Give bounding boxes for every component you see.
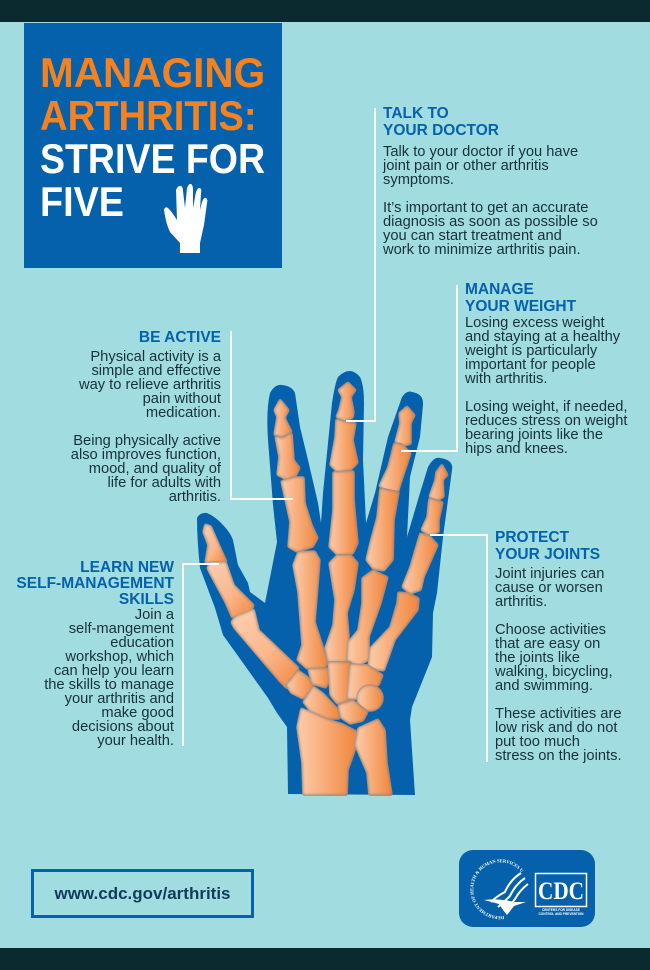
- top bar: [0, 0, 650, 22]
- heading: [16, 559, 174, 608]
- CDC mark: [536, 874, 586, 916]
- body text: workshop, which: [65, 649, 174, 665]
- body text: also improves function,: [71, 447, 221, 463]
- body text: Physical activity is a: [90, 349, 221, 365]
- body text: [495, 566, 622, 764]
- heading: PROTECT: [495, 529, 569, 546]
- CDC mark: CDC: [538, 878, 584, 905]
- body text: joint pain or other arthritis: [383, 158, 549, 174]
- heading: TALK TO: [383, 105, 449, 122]
- radius bone: [297, 708, 358, 795]
- body text: stress on the joints.: [495, 748, 622, 764]
- index finger: [274, 399, 292, 437]
- heading: BE ACTIVE: [139, 329, 221, 346]
- body text: reduces stress on weight: [465, 413, 627, 429]
- body text: make good: [101, 705, 174, 721]
- callout: talk to your doctor: [382, 105, 598, 258]
- body text: and swimming.: [495, 678, 593, 694]
- body text: Join a: [135, 607, 174, 623]
- body text: [44, 607, 174, 749]
- hand silhouette: [197, 371, 452, 795]
- body text: low risk and do not: [495, 720, 617, 736]
- body text: education: [110, 635, 174, 651]
- ulna bone: [355, 719, 392, 795]
- icon: white hand: [164, 184, 208, 253]
- middle finger: [336, 382, 356, 421]
- body text: Choose activities: [495, 622, 606, 638]
- body text: [382, 144, 598, 258]
- heading: LEARN NEW: [80, 559, 174, 576]
- ring finger: [395, 406, 415, 446]
- callout: protect your joints: [495, 529, 622, 764]
- body text: walking, bicycling,: [495, 664, 613, 680]
- body text: arthritis.: [169, 489, 221, 505]
- body text: life for adults with: [108, 475, 221, 491]
- title line: arthritis: ARTHRITIS:: [40, 92, 257, 139]
- little finger: [429, 464, 448, 501]
- body text: weight is particularly: [465, 343, 597, 359]
- heading: SKILLS: [119, 591, 174, 608]
- body text: Losing excess weight: [465, 315, 605, 331]
- body text: the skills to manage: [44, 677, 174, 693]
- body text: pain without: [143, 391, 221, 407]
- callout: manage your weight: [465, 281, 628, 457]
- callout lines: [183, 108, 487, 762]
- title line: strive for: STRIVE FOR: [40, 135, 265, 182]
- body text: way to relieve arthritis: [79, 377, 221, 393]
- body text: [71, 349, 222, 505]
- title panel: [24, 23, 282, 268]
- body text: mood, and quality of: [89, 461, 221, 477]
- title line: five: FIVE: [40, 178, 124, 225]
- body text: Talk to your doctor if you have: [383, 144, 578, 160]
- body text: that are easy on: [495, 636, 600, 652]
- body text: hips and knees.: [465, 441, 568, 457]
- body text: [465, 315, 628, 457]
- body text: the joints like: [495, 650, 580, 666]
- body text: Losing weight, if needed,: [465, 399, 628, 415]
- body text: Joint injuries can: [495, 566, 604, 582]
- finger and wrist bones: [203, 382, 448, 795]
- bottom bar: [0, 948, 650, 970]
- logo background: [459, 850, 595, 927]
- body text: important for people: [465, 357, 596, 373]
- body text: your health.: [97, 733, 174, 749]
- thumb bones: [203, 524, 227, 563]
- body text: put too much: [495, 734, 580, 750]
- heading: [383, 105, 499, 138]
- CDC mark: CONTROL AND PREVENTION: [539, 912, 584, 916]
- body text: bearing joints like the: [465, 427, 603, 443]
- heading: SELF-MANAGEMENT: [16, 575, 174, 592]
- title line: managing: MANAGING: [40, 49, 265, 96]
- website link box: [31, 869, 254, 918]
- body text: cause or worsen: [495, 580, 603, 596]
- body text: and staying at a healthy: [465, 329, 620, 345]
- body text: your arthritis and: [65, 691, 174, 707]
- CDC mark: CENTERS FOR DISEASE: [542, 908, 580, 912]
- heading: MANAGE: [465, 281, 534, 298]
- body text: decisions about: [72, 719, 174, 735]
- body text: Being physically active: [73, 433, 221, 449]
- body text: diagnosis as soon as possible so: [383, 214, 598, 230]
- heading: [495, 529, 600, 562]
- body text: These activities are: [495, 706, 622, 722]
- body text: work to minimize arthritis pain.: [383, 242, 581, 258]
- logos: HHS and CDC: [459, 850, 595, 927]
- body text: arthritis.: [495, 594, 547, 610]
- heading: [465, 281, 576, 314]
- website link box: www.cdc.gov/arthritis: [54, 884, 231, 903]
- heading: YOUR DOCTOR: [383, 122, 499, 138]
- body text: you can start treatment and: [383, 228, 562, 244]
- body text: simple and effective: [91, 363, 221, 379]
- body text: It’s important to get an accurate: [383, 200, 588, 216]
- carpal bones: [286, 670, 314, 699]
- callout: be active: [71, 329, 222, 505]
- body text: can help you learn: [54, 663, 174, 679]
- heading: YOUR JOINTS: [495, 546, 600, 562]
- body text: with arthritis.: [465, 371, 547, 387]
- body text: self-mangement: [69, 621, 174, 637]
- callout: learn new self-management skills: [16, 559, 174, 749]
- body text: symptoms.: [383, 172, 454, 188]
- heading: YOUR WEIGHT: [465, 298, 576, 314]
- body text: medication.: [146, 405, 221, 421]
